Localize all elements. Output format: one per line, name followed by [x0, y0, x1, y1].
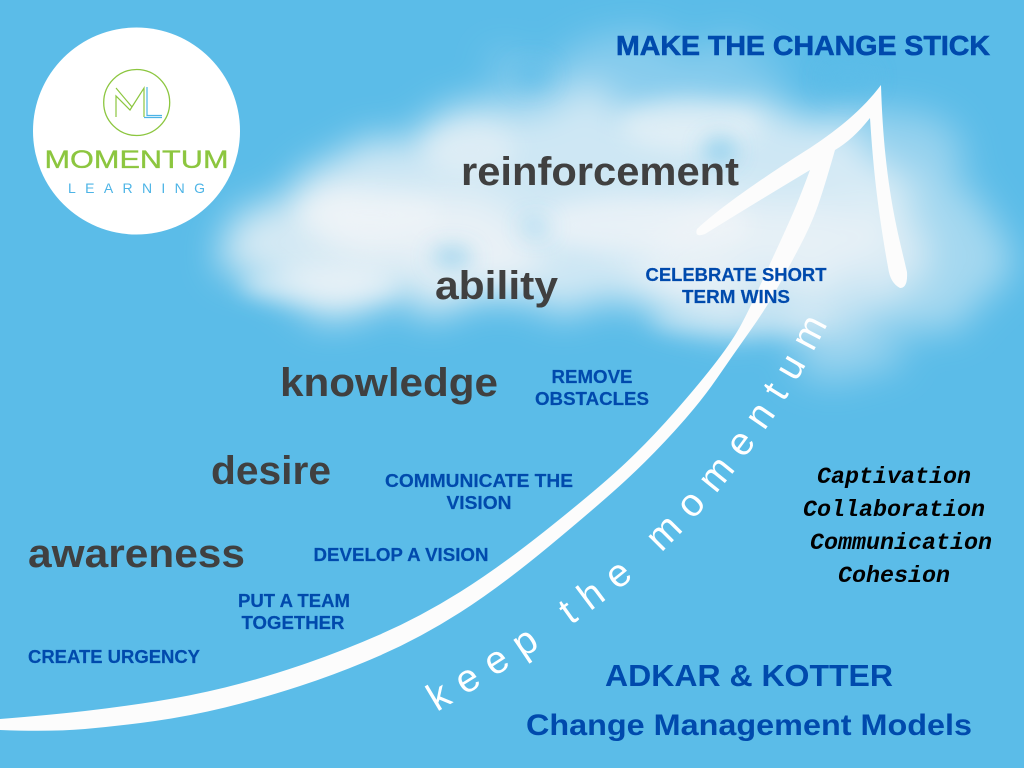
list item: collaboration: Collaboration	[803, 497, 985, 523]
list item: communication: Communication	[810, 530, 992, 556]
step: develop a vision: DEVELOP A VISION	[314, 545, 488, 565]
Kotter steps: VISION	[446, 493, 512, 513]
curved slogan: keep the momentum	[424, 318, 827, 711]
list item: captivation: Captivation	[817, 464, 971, 490]
Kotter steps: TERM WINS	[682, 287, 790, 307]
cloud	[225, 47, 1005, 382]
four Cs list	[803, 464, 992, 589]
arrow	[0, 85, 907, 731]
ADKAR stages	[28, 150, 739, 576]
step: communicate the vision: COMMUNICATE THE	[385, 471, 573, 491]
title line: change management models: Change Management Models	[526, 709, 972, 742]
stage: desire: desire	[211, 449, 331, 493]
logo name: MOMENTUM	[44, 146, 228, 174]
Kotter steps: TOGETHER	[242, 613, 344, 633]
title line: adkar and kotter: ADKAR & KOTTER	[605, 658, 893, 693]
stage: ability: ability	[435, 264, 559, 308]
logo monogram	[116, 87, 162, 118]
logo subtitle: LEARNING	[68, 180, 205, 196]
step: celebrate short term wins: CELEBRATE SHORT	[646, 265, 827, 285]
logo ring	[104, 70, 170, 136]
stage: reinforcement: reinforcement	[461, 150, 739, 194]
step: remove obstacles: REMOVE	[552, 367, 632, 387]
list item: cohesion: Cohesion	[838, 563, 950, 589]
Kotter steps: OBSTACLES	[535, 389, 649, 409]
logo badge	[33, 28, 240, 234]
step: create urgency: CREATE URGENCY	[28, 647, 200, 667]
stage: awareness: awareness	[28, 532, 245, 576]
Kotter steps	[28, 265, 827, 667]
step: put a team together: PUT A TEAM	[238, 591, 350, 611]
heading: make the change stick: MAKE THE CHANGE STICK	[616, 30, 990, 61]
model title	[526, 658, 972, 742]
stage: knowledge: knowledge	[280, 361, 498, 405]
